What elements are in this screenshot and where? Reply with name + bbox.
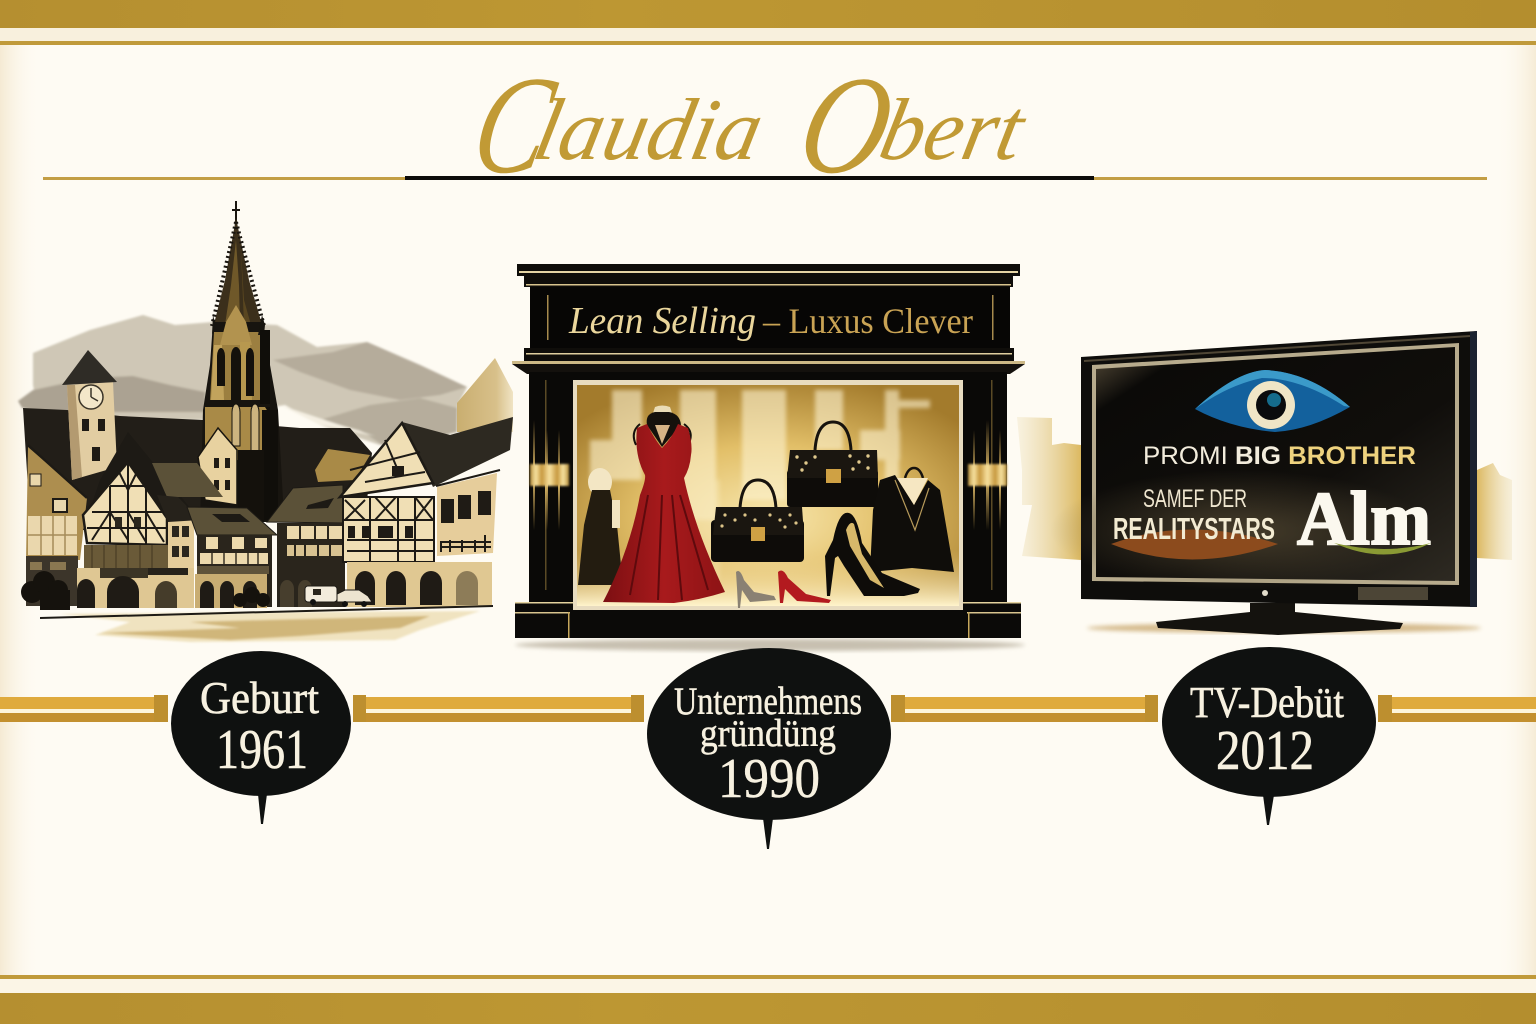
title: O	[787, 47, 906, 203]
clock tower	[62, 350, 117, 480]
small mannequin	[578, 468, 623, 585]
milestone: Unternehmensgründung 1990: Unternehmens	[674, 680, 862, 723]
milestone: Unternehmensgründung 1990: 1990	[718, 748, 820, 810]
cathedral	[198, 201, 284, 522]
centre half-timbered house	[77, 432, 223, 608]
timeline bar	[0, 695, 1536, 722]
right half-timbered house	[340, 417, 513, 607]
illustration: old town with cathedral	[18, 201, 513, 642]
eye logo	[1195, 370, 1350, 432]
TV panel	[1358, 587, 1428, 600]
black high heel	[825, 513, 920, 596]
red pump	[778, 570, 831, 603]
gold gable behind	[315, 449, 370, 482]
shop facade	[512, 264, 1025, 638]
TV stand	[1156, 603, 1403, 635]
sign text: Lean Selling	[568, 300, 756, 342]
sign text right: – Luxus Clever	[762, 301, 973, 341]
timeline segment 4	[1378, 695, 1536, 722]
trees and bushes	[21, 571, 270, 610]
handbag upper	[787, 422, 878, 507]
timeline segment 3	[891, 695, 1158, 722]
title underline	[43, 176, 1487, 180]
milestone: Geburt 1961: Geburt	[200, 672, 319, 723]
pillar lines	[545, 380, 546, 590]
title	[461, 47, 1042, 203]
grey pump	[736, 571, 776, 608]
black jacket	[870, 468, 954, 572]
handbag lower	[711, 480, 804, 562]
red dress on mannequin	[603, 406, 725, 603]
milestone: TV-Debüt 2012	[1162, 647, 1376, 825]
title: laudia	[526, 82, 772, 179]
milestone: Unternehmensgründung 1990: gründüng	[700, 712, 836, 755]
milestone: Geburt 1961: 1961	[216, 719, 308, 781]
illustration: television	[1017, 331, 1512, 635]
Samef der: SAMEF DER	[1143, 485, 1247, 513]
milestone: TV-Debüt 2012: TV-Debüt	[1190, 678, 1344, 727]
timeline segment 2	[353, 695, 644, 722]
green swoosh	[1334, 543, 1431, 554]
gold city silhouettes behind TV	[1017, 417, 1512, 560]
TV body	[1081, 331, 1477, 607]
window display	[573, 380, 963, 610]
power light	[1262, 590, 1268, 596]
title: bert	[872, 82, 1035, 179]
Realitystars: REALITYSTARS	[1113, 511, 1275, 546]
bottom gold border	[0, 975, 1536, 1024]
pillar glow lights	[530, 420, 1007, 530]
title: C	[461, 47, 567, 203]
left house	[26, 445, 87, 606]
Alm: Alm	[1297, 477, 1431, 561]
cars	[305, 586, 372, 607]
milestone: TV-Debüt 2012: 2012	[1216, 720, 1314, 782]
timeline segment 1	[0, 695, 168, 722]
top gold border	[0, 0, 1536, 45]
middle right building	[267, 485, 345, 607]
TV shadow	[1087, 623, 1481, 633]
sign ornaments	[547, 295, 548, 340]
town square	[40, 605, 493, 642]
milestone: Unternehmensgründung 1990	[647, 648, 891, 849]
illustration: boutique shop window	[512, 264, 1025, 651]
orange swoosh	[1111, 530, 1278, 560]
small gold tower	[457, 358, 513, 432]
mountains	[18, 315, 467, 450]
dark rooftops	[23, 408, 372, 520]
screen	[1050, 343, 1459, 590]
Promi Big Brother: PROMI BIG BROTHER	[1143, 442, 1416, 470]
milestone: Geburt 1961	[171, 651, 351, 824]
low centre building	[187, 507, 277, 608]
shop shadow	[515, 639, 1025, 651]
